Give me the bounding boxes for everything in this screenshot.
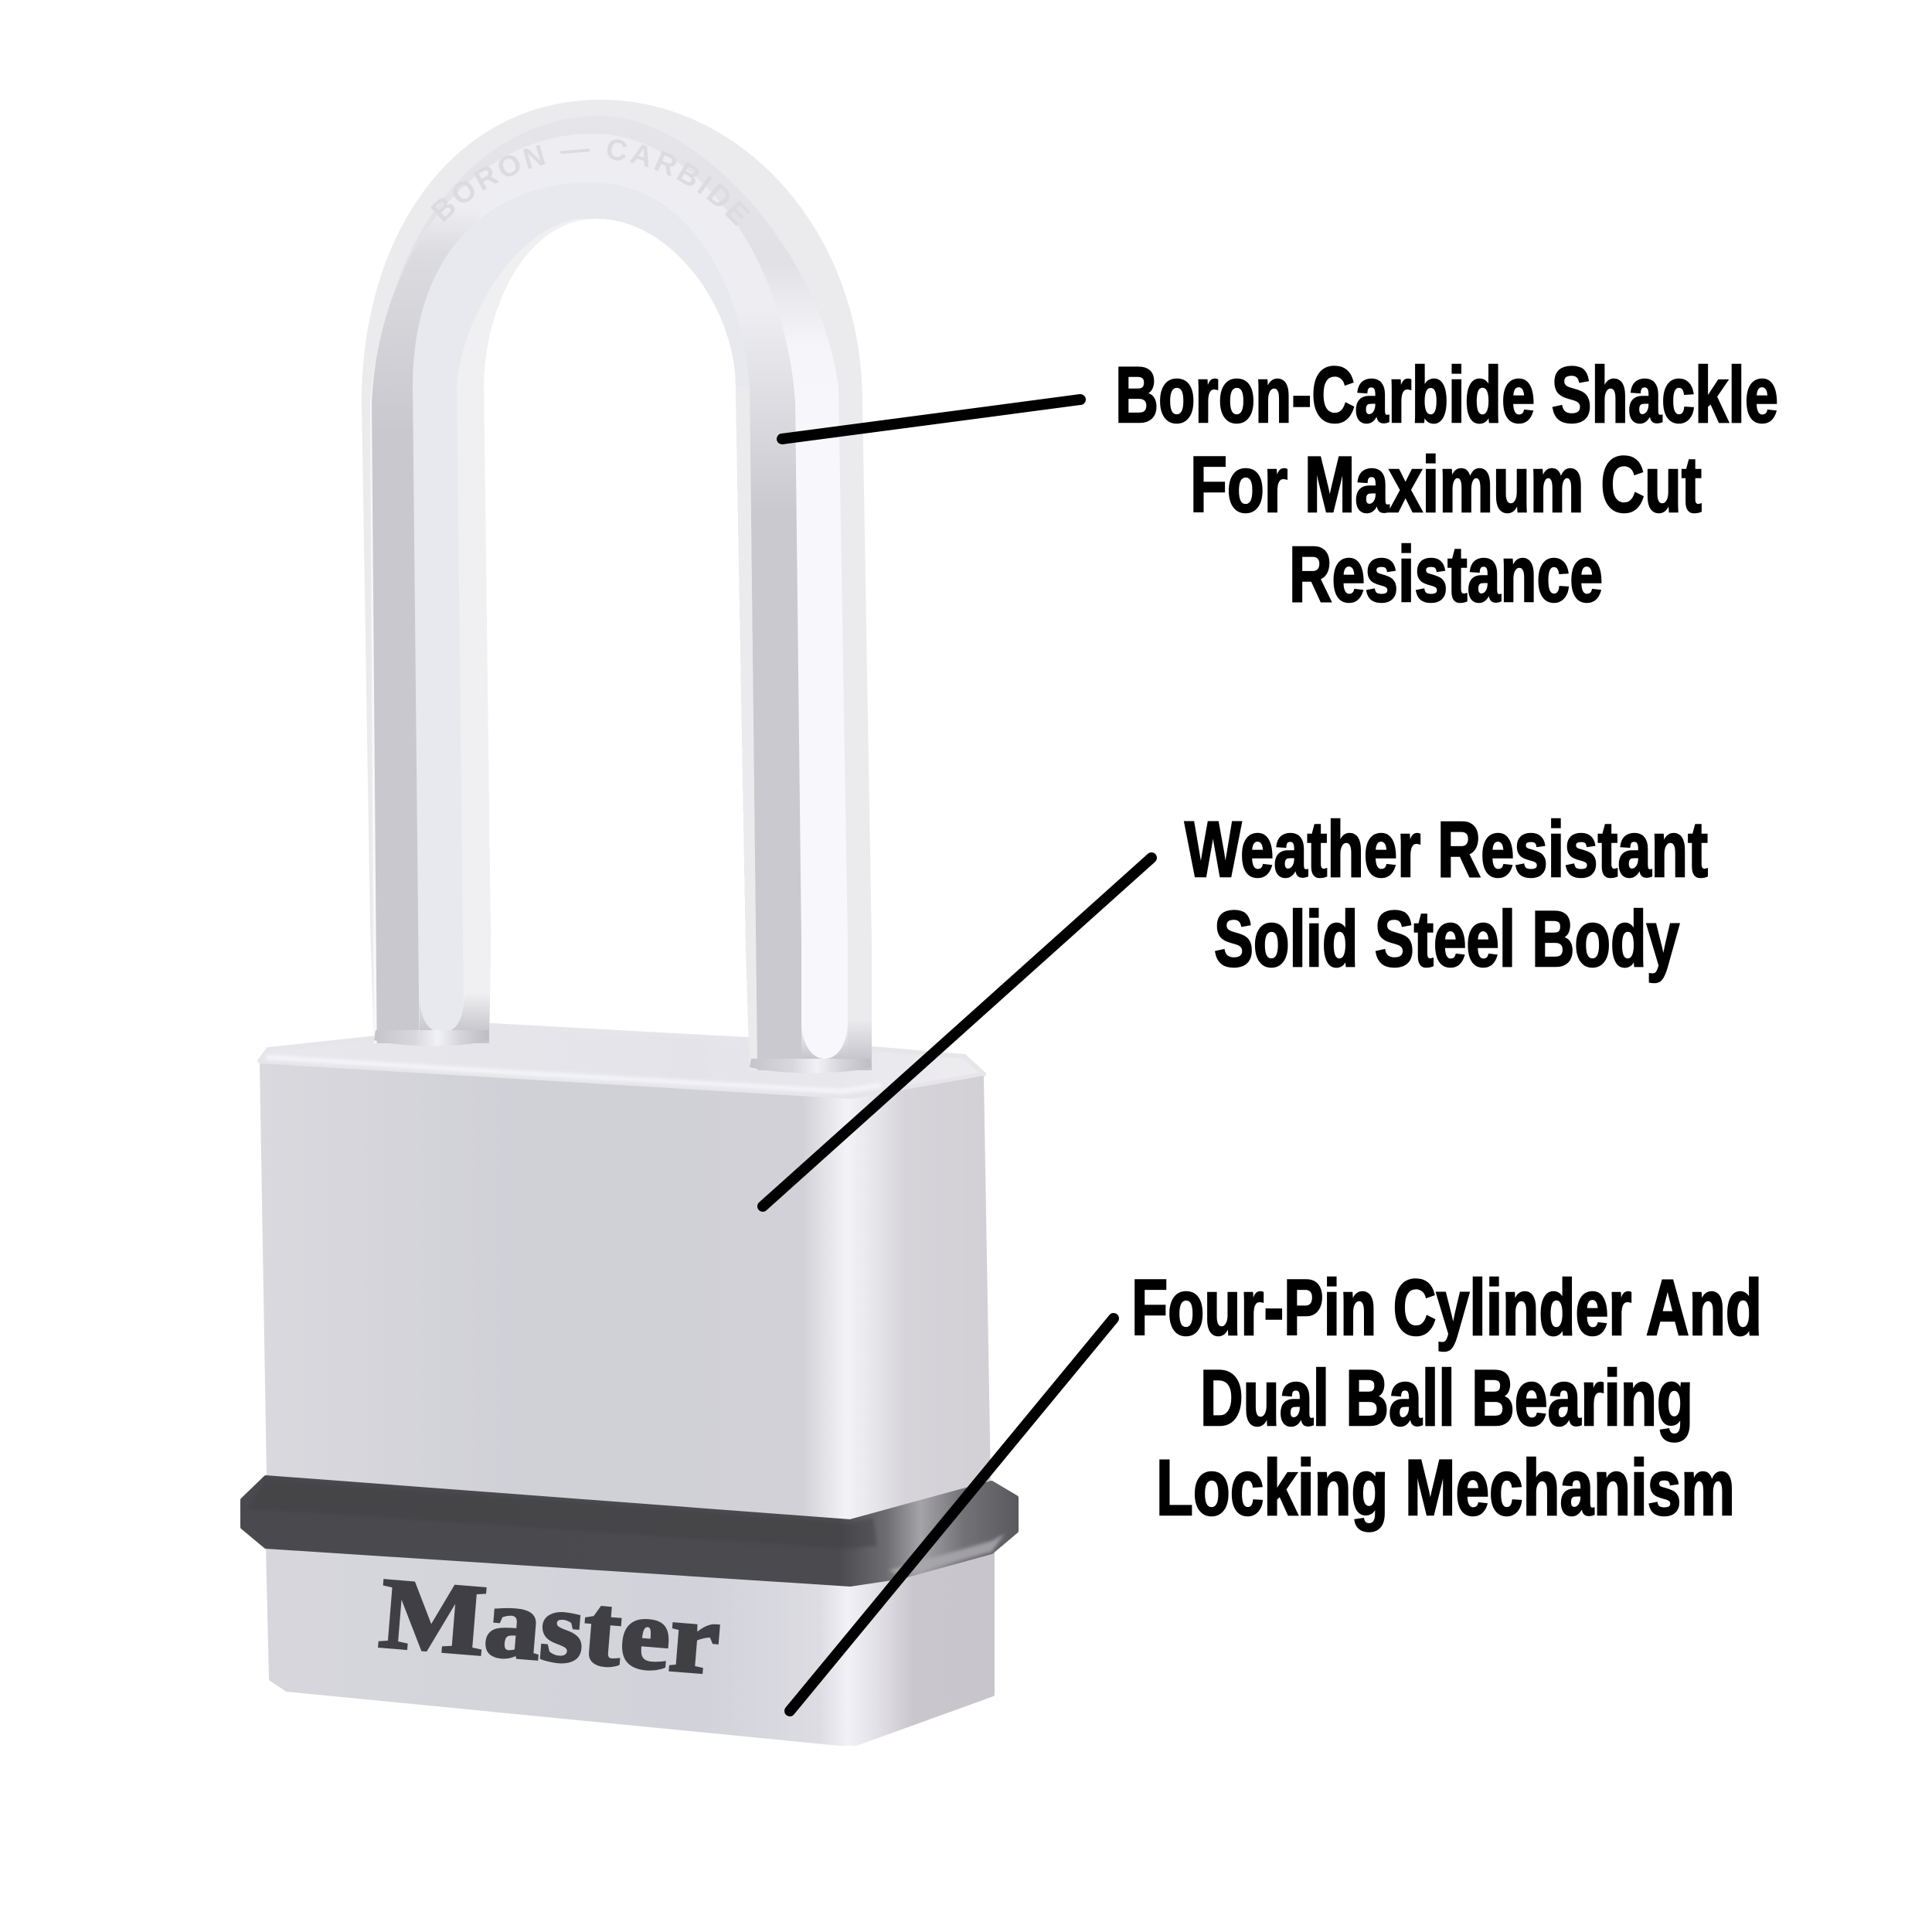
black rubber bumper [243, 1478, 1016, 1584]
shackle label text [1115, 351, 1778, 618]
padlock body top surface [260, 1026, 984, 1097]
boron-carbide shackle [362, 100, 872, 1073]
body label text [1185, 805, 1708, 983]
leader line: shackle [782, 400, 1080, 439]
leader line: locking mechanism [790, 1318, 1114, 1711]
padlock lower steel body [267, 1546, 993, 1744]
right shackle collar [750, 1059, 872, 1073]
padlock upper steel body [260, 1063, 991, 1521]
shackle label text: For Maximum Cut [1190, 440, 1702, 529]
callout: shackle [782, 351, 1778, 618]
left shackle collar [374, 1030, 489, 1046]
shackle label text: Resistance [1289, 530, 1603, 618]
leader line: body [763, 858, 1151, 1206]
callout: locking mechanism [790, 1264, 1762, 1711]
locking mechanism label text: Locking Mechanism [1156, 1444, 1735, 1532]
locking mechanism label text [1131, 1264, 1762, 1532]
engraved shackle text: BORON — CARBIDE [430, 139, 737, 226]
callout: body [763, 805, 1708, 1206]
locking mechanism label text: Dual Ball Bearing [1200, 1354, 1693, 1442]
padlock illustration [240, 100, 1048, 1746]
body label text: Weather Resistant [1185, 805, 1708, 893]
Master brand logo: Master [376, 1557, 724, 1696]
body label text: Solid Steel Body [1214, 895, 1679, 983]
